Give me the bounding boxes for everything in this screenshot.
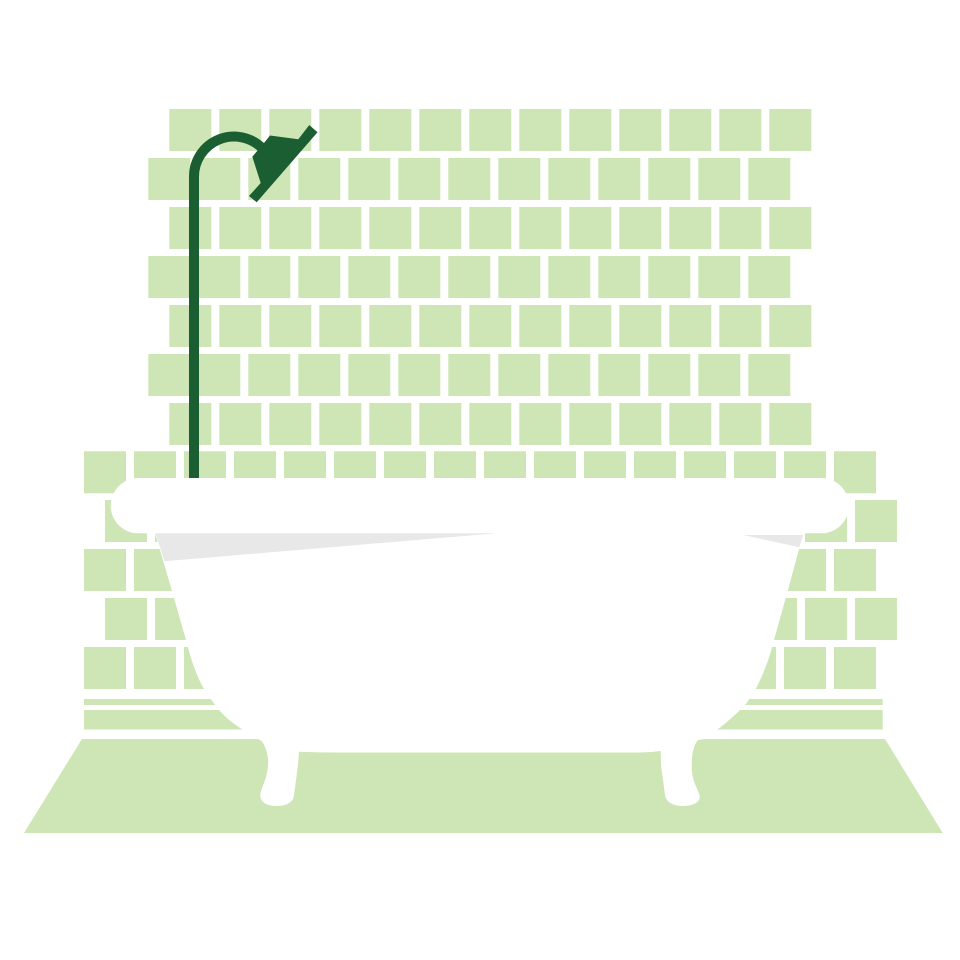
tub body and feet bbox=[155, 533, 804, 806]
shower head bbox=[249, 125, 318, 202]
inner shadow right bbox=[743, 535, 803, 547]
shower pipe bbox=[194, 137, 262, 478]
floor bbox=[24, 739, 943, 833]
skirting stripes bbox=[84, 699, 883, 730]
shower bbox=[194, 125, 318, 478]
upper tiled wall bbox=[148, 130, 811, 424]
inner shadow left bbox=[156, 533, 497, 561]
tub rim bbox=[111, 478, 849, 533]
lower tiled wall bbox=[84, 472, 897, 668]
bathtub bbox=[111, 478, 849, 806]
